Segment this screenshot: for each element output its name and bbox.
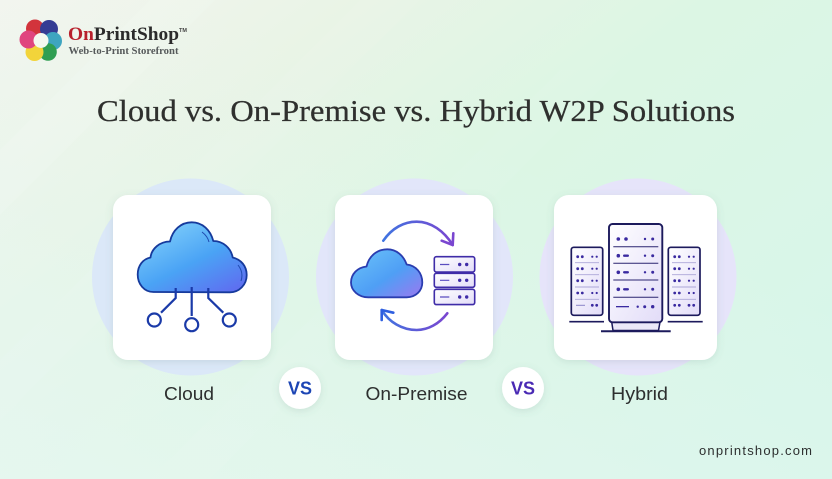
background circle: cloud — [92, 178, 289, 376]
brand name: OnPrintShop — [68, 24, 179, 45]
icon: cloud network — [138, 222, 247, 331]
label: Hybrid: Hybrid — [611, 384, 668, 404]
card: on-premise — [335, 195, 493, 360]
card: cloud — [113, 195, 271, 360]
VS badge 1 — [279, 367, 321, 409]
arrow: bottom — [382, 310, 447, 330]
arrow: top — [383, 222, 453, 245]
VS badge 1: VS — [288, 378, 312, 398]
icon: colour petals — [20, 20, 62, 61]
VS badge 2 — [502, 367, 544, 409]
title: Cloud vs. On-Premise vs. Hybrid W2P Solutions — [97, 93, 735, 128]
panel: on-premise — [316, 178, 513, 404]
website url: onprintshop.com — [699, 443, 812, 458]
label: On-Premise: On-Premise — [366, 384, 468, 404]
centre rack — [601, 224, 671, 331]
server stack — [434, 257, 475, 305]
trademark: TM — [179, 28, 187, 34]
VS badge 2: VS — [511, 378, 535, 398]
left rack — [569, 247, 604, 322]
label: Cloud: Cloud — [164, 384, 214, 404]
background circle: hybrid — [540, 178, 736, 376]
icon: cloud and server sync — [351, 222, 475, 330]
right rack — [668, 247, 703, 322]
tagline: Web-to-Print Storefront — [68, 46, 179, 57]
icon: server racks — [569, 224, 703, 331]
background circle: on-premise — [316, 178, 513, 376]
cloud — [351, 249, 422, 297]
panel: hybrid — [540, 178, 736, 404]
logo: OnPrintShop — [20, 20, 187, 61]
panel: cloud — [92, 178, 289, 404]
card: hybrid — [554, 195, 717, 360]
